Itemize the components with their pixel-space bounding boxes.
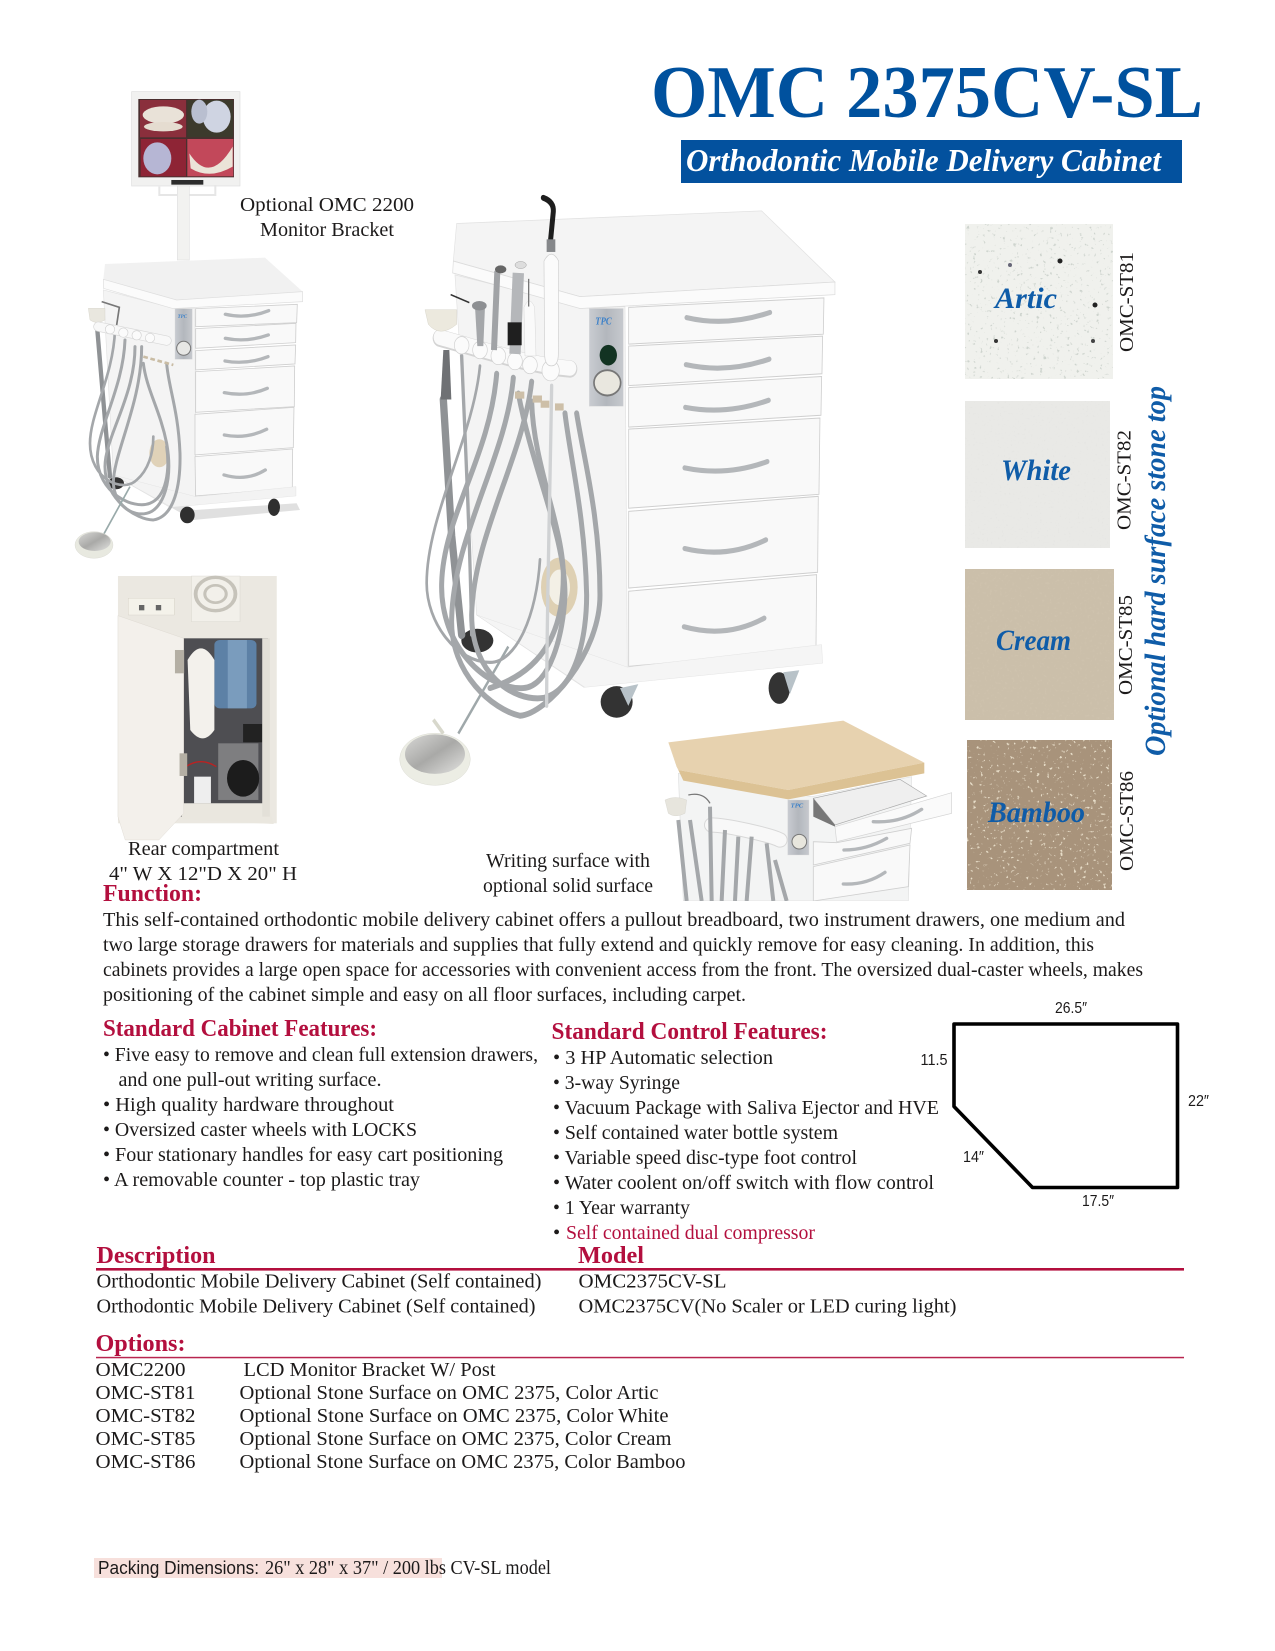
image: cabinet with solid surface top: [665, 721, 952, 901]
table: options: [96, 1331, 1184, 1473]
section: function: cabinets provides a large open space for accessories with convenient access from the front. The oversized dual-caster wheels, makes: [103, 959, 1143, 981]
section: standard control features: • Water coolent on/off switch with flow control: [553, 1172, 934, 1194]
table: options: OMC2200: [96, 1359, 186, 1381]
footer: packing dimensions: Packing Dimensions:: [98, 1558, 259, 1578]
table: description and model: OMC2375CV-SL: [578, 1270, 726, 1292]
table: options: OMC-ST86: [96, 1451, 196, 1473]
section: standard control features: • Self contained water bottle system: [553, 1122, 838, 1144]
subtitle banner: Orthodontic Mobile Delivery Cabinet: [686, 142, 1162, 178]
table: description and model: Description: [96, 1243, 216, 1269]
swatch: White: White: [1001, 454, 1071, 487]
table: options: Optional Stone Surface on OMC 2375, Color Artic: [240, 1382, 658, 1404]
caption: writing surface: optional solid surface: [483, 875, 653, 897]
swatch codes: [1114, 252, 1138, 871]
diagram: top dimensions: 22″: [1188, 1093, 1209, 1110]
swatch codes: OMC-ST82: [1114, 430, 1136, 530]
table: options: OMC-ST82: [96, 1405, 196, 1427]
caption: rear compartment: [109, 838, 297, 885]
image: main cabinet: TPC: [595, 317, 612, 328]
caption: rear compartment: Rear compartment: [128, 838, 279, 860]
section: standard control features: • 3 HP Automatic selection: [553, 1047, 773, 1069]
section: function: This self-contained orthodontic mobile delivery cabinet offers a pullout breadboard, two instrument drawers, one medium and: [103, 909, 1125, 931]
swatch: Cream: [965, 569, 1114, 720]
section: function: positioning of the cabinet simple and easy on all floor surfaces, including carpet.: [103, 984, 746, 1006]
swatch: Artic: Artic: [993, 282, 1057, 315]
image: rear compartment: [118, 576, 277, 840]
table: options: Optional Stone Surface on OMC 2375, Color White: [240, 1405, 668, 1427]
diagram: top dimensions: 17.5″: [1082, 1193, 1114, 1210]
swatch codes: OMC-ST86: [1116, 771, 1138, 871]
swatch codes: OMC-ST85: [1115, 595, 1137, 695]
swatch: Artic: [965, 224, 1113, 379]
section: standard cabinet features: • High quality hardware throughout: [103, 1094, 394, 1116]
caption: writing surface: Writing surface with: [486, 850, 650, 872]
table: options: OMC-ST85: [96, 1428, 196, 1450]
image: cabinet with monitor bracket: TPC: [178, 315, 188, 320]
section: standard control features: • 1 Year warranty: [553, 1197, 691, 1219]
caption: writing surface: [483, 850, 653, 897]
caption: monitor bracket: Optional OMC 2200: [240, 194, 414, 216]
section: standard control features: • 3-way Syringe: [553, 1072, 680, 1094]
title: OMC 2375CV-SL: [651, 52, 1203, 134]
section: standard cabinet features: • Five easy to remove and clean full extension drawers,: [103, 1044, 538, 1066]
caption: rear compartment: 4" W X 12"D X 20" H: [109, 863, 297, 885]
caption: monitor bracket: Monitor Bracket: [260, 219, 394, 241]
table: description and model: Orthodontic Mobile Delivery Cabinet (Self contained): [96, 1296, 536, 1318]
image: cabinet with solid surface top: TPC: [791, 802, 804, 809]
footer: packing dimensions: 26" x 28" x 37" / 200 lbs CV-SL model: [265, 1558, 552, 1579]
swatch: Cream: Cream: [996, 624, 1071, 657]
swatch: Bamboo: [967, 740, 1112, 890]
table: description and model: Model: [578, 1243, 644, 1269]
table: options: LCD Monitor Bracket W/ Post: [244, 1359, 496, 1381]
footer: packing dimensions: [94, 1558, 552, 1579]
diagram: top dimensions: [920, 1000, 1209, 1210]
diagram: top dimensions: 26.5″: [1055, 1000, 1087, 1017]
table: description and model: Orthodontic Mobile Delivery Cabinet (Self contained): [96, 1270, 542, 1292]
section: function: two large storage drawers for materials and supplies that fully extend and quickly remove for easy cleaning. In addition, this: [103, 934, 1094, 956]
section: standard cabinet features: [103, 1016, 538, 1191]
swatch codes: OMC-ST81: [1116, 252, 1138, 352]
section: standard control features: • Vacuum Package with Saliva Ejector and HVE: [553, 1097, 939, 1119]
section: standard control features: Standard Control Features:: [552, 1019, 828, 1045]
section: standard cabinet features: • Oversized caster wheels with LOCKS: [103, 1119, 417, 1141]
section: standard control features: [552, 1019, 939, 1244]
section: standard control features: Self contained dual compressor: [566, 1222, 815, 1244]
section: standard control features: •: [553, 1222, 560, 1244]
swatch: White: [965, 401, 1110, 548]
section: function: [103, 881, 1143, 1006]
image: cabinet with monitor bracket: [75, 92, 303, 558]
table: description and model: OMC2375CV(No Scaler or LED curing light): [578, 1296, 956, 1318]
swatch: Bamboo: Bamboo: [987, 796, 1085, 829]
image: main cabinet: [400, 198, 835, 785]
table: options: Optional Stone Surface on OMC 2375, Color Cream: [240, 1428, 672, 1450]
table: options: OMC-ST81: [96, 1382, 196, 1404]
table: options: Options:: [96, 1331, 186, 1357]
table: description and model: [96, 1243, 1184, 1318]
section: standard cabinet features: Standard Cabinet Features:: [103, 1016, 377, 1042]
section: standard control features: • Variable speed disc-type foot control: [553, 1147, 857, 1169]
vertical heading: stone top: Optional hard surface stone top: [1139, 386, 1172, 756]
section: standard cabinet features: • Four stationary handles for easy cart positioning: [103, 1144, 503, 1166]
table: options: Optional Stone Surface on OMC 2375, Color Bamboo: [240, 1451, 686, 1473]
diagram: top dimensions: 14″: [963, 1149, 984, 1166]
section: function: Function:: [103, 881, 202, 907]
diagram: top dimensions: 11.5: [920, 1052, 948, 1069]
caption: monitor bracket: [240, 194, 414, 241]
section: standard cabinet features: and one pull-out writing surface.: [118, 1069, 382, 1091]
section: standard cabinet features: • A removable counter - top plastic tray: [103, 1169, 421, 1191]
